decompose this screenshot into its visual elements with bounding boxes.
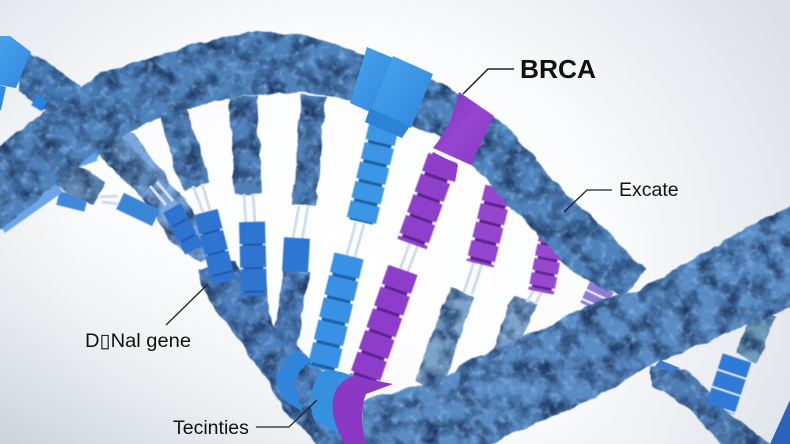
connector: blue under band (365, 108, 410, 138)
band: blue top left (350, 47, 393, 112)
label: Tecinties (173, 400, 317, 439)
bottom front strand (360, 205, 790, 444)
rungs: textured stems (48, 96, 766, 386)
label: BRCA: BRCA (520, 54, 596, 84)
connector: purple under band (425, 152, 458, 182)
band: bottom purple (332, 376, 393, 444)
band: bottom left blue (276, 351, 312, 412)
top front strand (0, 32, 645, 298)
label: Tecinties: Tecinties (173, 417, 249, 439)
blue base-pair segments (172, 126, 384, 370)
rung connector lines (100, 182, 543, 304)
label: Excate: Excate (619, 179, 679, 201)
label: Excate (564, 179, 679, 212)
band: BRCA purple (433, 92, 494, 165)
purple base-pair segments (364, 158, 606, 380)
band: bottom middle blue (311, 371, 352, 434)
back rungs lower left (0, 100, 156, 226)
band: blue top right (371, 56, 433, 128)
lower right blue rung (720, 358, 737, 410)
label: BRCA (463, 54, 596, 94)
band: far left blue (0, 36, 31, 88)
label: DNal gene: D▯Nal gene (85, 331, 191, 352)
label: DNal gene (85, 284, 208, 352)
